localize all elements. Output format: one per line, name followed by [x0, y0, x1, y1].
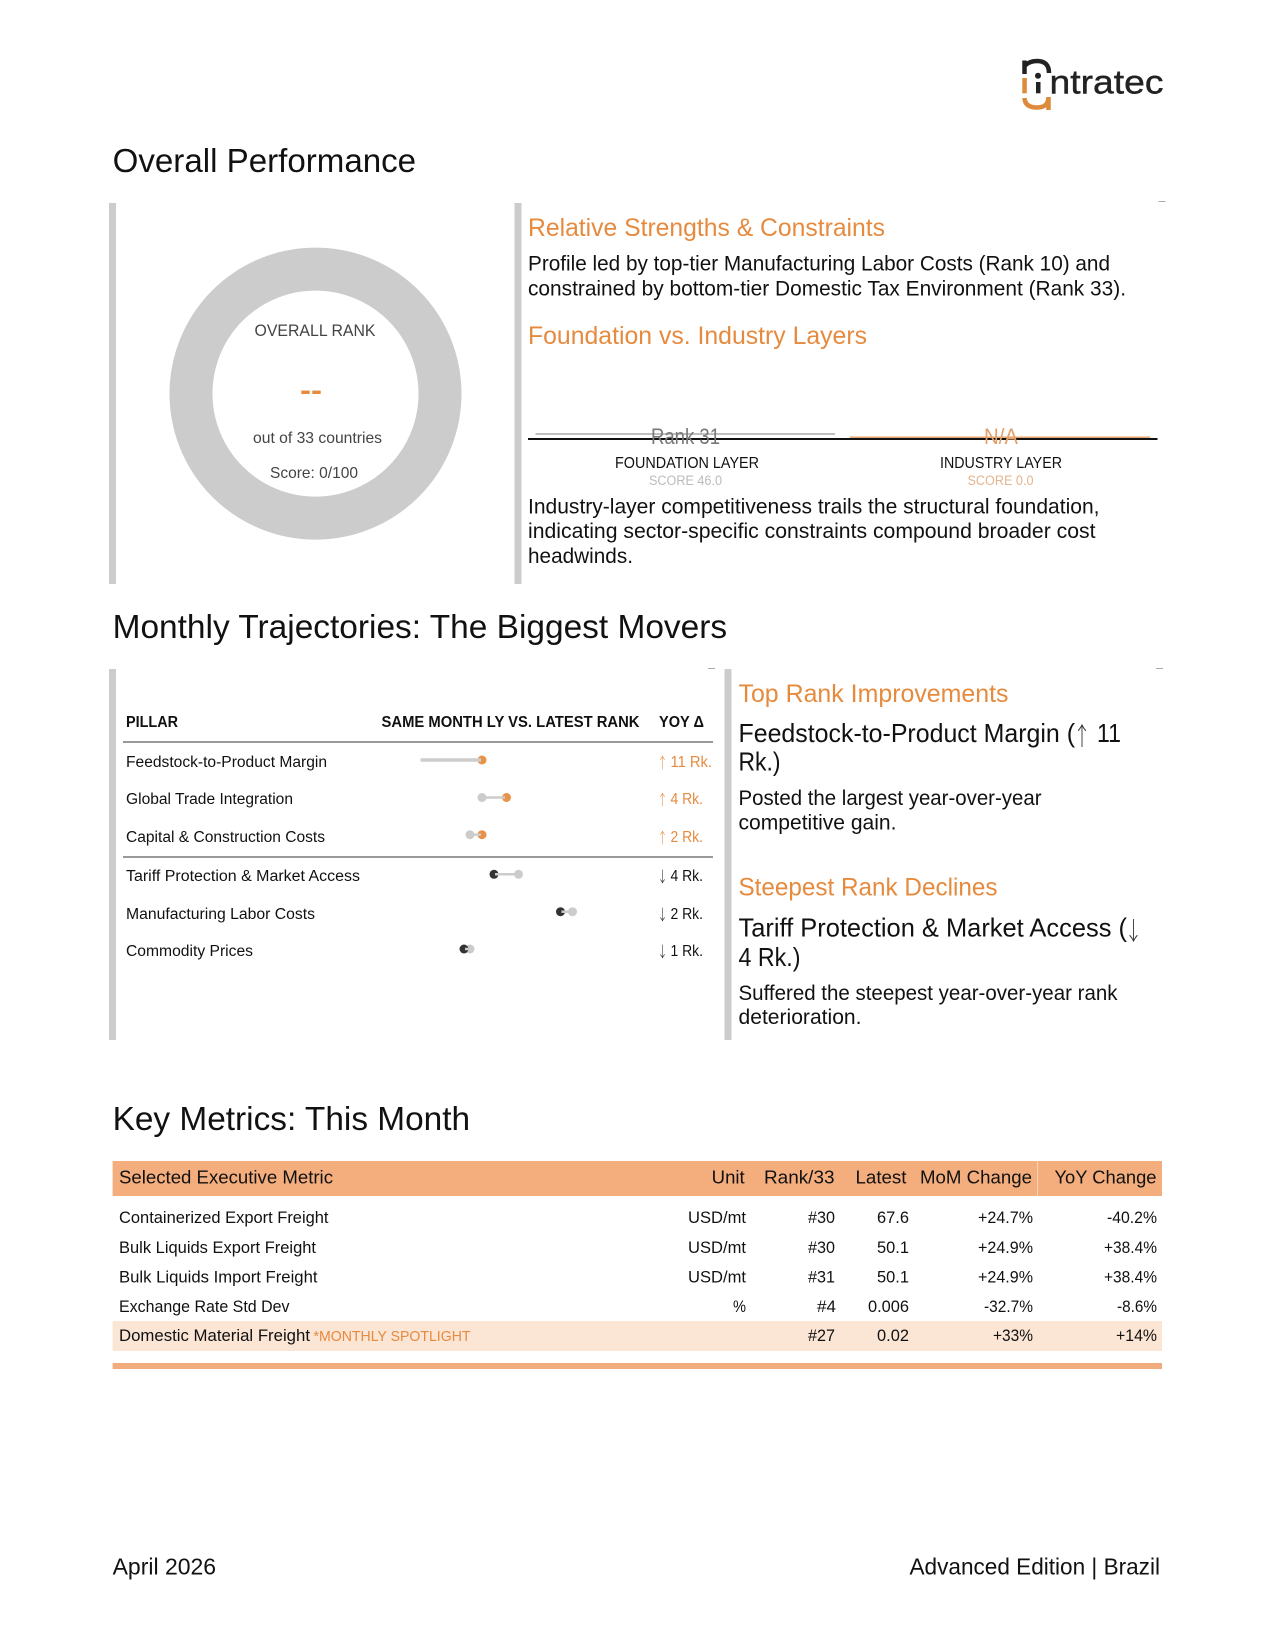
row: feedstock-to-product margin [126, 752, 712, 773]
row: commodity prices: ↓ [658, 941, 668, 962]
row: domestic material freight: Domestic Material Freight [119, 1326, 310, 1345]
footer: edition: Advanced Edition | Brazil [910, 1554, 1160, 1580]
row: exchange rate std dev: -8.6% [1117, 1297, 1157, 1316]
chart: layer comparison: Rank 31 [651, 424, 720, 449]
row: bulk liquids export freight: #30 [808, 1238, 835, 1257]
row: bulk liquids export freight [119, 1238, 1157, 1257]
table: key metrics [113, 1161, 1162, 1369]
row: exchange rate std dev: Exchange Rate Std Dev [119, 1297, 290, 1316]
row: containerized export freight: Containerized Export Freight [119, 1208, 329, 1227]
row: bulk liquids import freight [119, 1268, 1157, 1286]
panel: overall rank [109, 203, 440, 584]
logo: intratec: ntratec [1050, 63, 1164, 100]
row: exchange rate std dev: % [733, 1297, 746, 1316]
heading: relative strengths: Relative Strengths & Constraints [528, 214, 885, 242]
row: commodity prices: 1 Rk. [670, 943, 703, 960]
row: bulk liquids import freight: +38.4% [1104, 1268, 1157, 1286]
table header row: MoM Change [920, 1168, 1032, 1188]
table header: YOY Δ [659, 714, 704, 731]
text: tariff note: Suffered the steepest year-over-year rank [738, 981, 1118, 1005]
logo: intratec [1022, 60, 1164, 110]
row: bulk liquids import freight: +24.9% [978, 1268, 1033, 1286]
panel: strengths and layers [514, 201, 1166, 584]
callout: tariff protection: Tariff Protection & Market Access ( [738, 912, 1127, 942]
row: global trade integration: 4 Rk. [670, 791, 703, 808]
text: layers body: headwinds. [528, 544, 633, 568]
value: rank placeholder: -- [300, 375, 322, 407]
callout: feedstock margin: 11 [1097, 718, 1121, 748]
row: manufacturing labor costs [126, 904, 703, 925]
table header: SAME MONTH LY VS. LATEST RANK [382, 714, 640, 731]
text: layers body [528, 494, 1100, 568]
table header row: Selected Executive Metric [119, 1168, 333, 1188]
row: global trade integration [126, 789, 703, 810]
table header row: Rank/33 [764, 1168, 834, 1188]
label: overall rank: OVERALL RANK [254, 322, 376, 340]
row: tariff protection and market access: 4 Rk. [670, 868, 703, 885]
row: bulk liquids export freight: Bulk Liquids Export Freight [119, 1238, 316, 1257]
text: tariff note [738, 981, 1118, 1029]
heading: monthly trajectories: Monthly Trajectories: The Biggest Movers [113, 608, 727, 645]
chart: layer comparison: N/A [984, 424, 1018, 449]
row: exchange rate std dev: -32.7% [984, 1297, 1033, 1316]
row: exchange rate std dev: 0.006 [868, 1297, 909, 1316]
heading: top rank improvements: Top Rank Improvements [738, 680, 1008, 708]
row: bulk liquids import freight: 50.1 [877, 1268, 909, 1286]
row: tariff protection and market access: Tariff Protection & Market Access [126, 868, 360, 885]
text: strengths body: constrained by bottom-tier Domestic Tax Environment (Rank 33). [528, 276, 1126, 300]
table header row: YoY Change [1054, 1168, 1156, 1188]
donut chart [191, 269, 440, 518]
row: containerized export freight [119, 1208, 1157, 1227]
row: commodity prices: Commodity Prices [126, 943, 253, 960]
table header [126, 714, 704, 731]
table header row: Unit [712, 1168, 745, 1188]
row: manufacturing labor costs: Manufacturing Labor Costs [126, 906, 315, 923]
text: strengths body: Profile led by top-tier Manufacturing Labor Costs (Rank 10) and [528, 252, 1110, 276]
callout: feedstock margin: Feedstock-to-Product Margin ( [738, 718, 1075, 748]
text: layers body: indicating sector-specific constraints compound broader cost [528, 519, 1096, 543]
row: domestic material freight [119, 1326, 1157, 1345]
callout: feedstock margin: ↑ [1073, 717, 1091, 753]
row: domestic material freight: +33% [993, 1326, 1033, 1345]
row: capital and construction costs: 2 Rk. [670, 829, 703, 846]
chart: layer comparison: FOUNDATION LAYER [615, 455, 759, 472]
row: tariff protection and market access: ↓ [658, 866, 668, 887]
row: global trade integration: ↑ [658, 789, 668, 810]
callout: tariff protection [738, 912, 1142, 972]
heading: steepest rank declines: Steepest Rank Declines [738, 874, 998, 902]
row: capital and construction costs: Capital & Construction Costs [126, 829, 325, 846]
row: exchange rate std dev: #4 [817, 1297, 836, 1316]
row: containerized export freight: 67.6 [877, 1208, 909, 1227]
row: bulk liquids import freight: Bulk Liquids Import Freight [119, 1268, 318, 1286]
callout: feedstock margin: Rk.) [738, 746, 780, 776]
text: feedstock note [738, 786, 1042, 834]
chart: layer comparison [528, 424, 1158, 488]
chart: layer comparison: SCORE 0.0 [968, 473, 1034, 488]
row: bulk liquids export freight: +24.9% [978, 1238, 1033, 1257]
row: capital and construction costs [126, 827, 703, 848]
row: global trade integration: Global Trade Integration [126, 791, 293, 808]
text: layers body: Industry-layer competitiveness trails the structural foundation, [528, 494, 1100, 518]
row: capital and construction costs: ↑ [658, 827, 668, 848]
table header row: Latest [856, 1168, 906, 1188]
callout: feedstock margin [738, 717, 1121, 776]
row: containerized export freight: USD/mt [688, 1208, 746, 1227]
chart: layer comparison: INDUSTRY LAYER [940, 455, 1062, 472]
row: domestic material freight: *MONTHLY SPOTLIGHT [314, 1329, 471, 1345]
row: domestic material freight: #27 [808, 1326, 835, 1345]
row: bulk liquids import freight: USD/mt [688, 1268, 746, 1286]
row: manufacturing labor costs: ↓ [658, 904, 668, 925]
table header row [119, 1168, 1156, 1188]
row: feedstock-to-product margin: 11 Rk. [670, 754, 712, 771]
row: bulk liquids export freight: +38.4% [1104, 1238, 1157, 1257]
row: containerized export freight: -40.2% [1107, 1208, 1157, 1227]
text: tariff note: deterioration. [738, 1005, 862, 1029]
row: tariff protection and market access [126, 866, 703, 887]
row: bulk liquids export freight: USD/mt [688, 1238, 746, 1257]
row: manufacturing labor costs: 2 Rk. [670, 906, 703, 923]
row: domestic material freight: +14% [1116, 1326, 1157, 1345]
heading: foundation vs industry: Foundation vs. Industry Layers [528, 322, 867, 350]
callout: tariff protection: ↓ [1124, 912, 1142, 948]
text: feedstock note: competitive gain. [738, 810, 896, 834]
row: bulk liquids import freight: #31 [808, 1268, 835, 1286]
label: out of 33 countries: out of 33 countries [253, 430, 382, 447]
heading: key metrics: Key Metrics: This Month [113, 1100, 470, 1137]
footer: date: April 2026 [113, 1554, 216, 1580]
panel: pillar movers table [109, 668, 715, 1040]
row: containerized export freight: +24.7% [978, 1208, 1033, 1227]
callout: tariff protection: 4 Rk.) [738, 942, 800, 972]
label: score: Score: 0/100 [270, 465, 358, 482]
row: bulk liquids export freight: 50.1 [877, 1238, 909, 1257]
row: commodity prices [126, 941, 703, 962]
text: strengths body [528, 252, 1126, 300]
text: feedstock note: Posted the largest year-over-year [738, 786, 1042, 810]
chart: layer comparison: SCORE 46.0 [649, 473, 722, 488]
row: containerized export freight: #30 [808, 1208, 835, 1227]
heading: overall performance: Overall Performance [113, 142, 416, 179]
table header: PILLAR [126, 714, 178, 731]
row: domestic material freight: 0.02 [877, 1326, 909, 1345]
panel: top movers commentary [724, 668, 1163, 1040]
row: feedstock-to-product margin: ↑ [658, 752, 668, 773]
row: feedstock-to-product margin: Feedstock-to-Product Margin [126, 754, 327, 771]
row: exchange rate std dev [119, 1297, 1157, 1316]
